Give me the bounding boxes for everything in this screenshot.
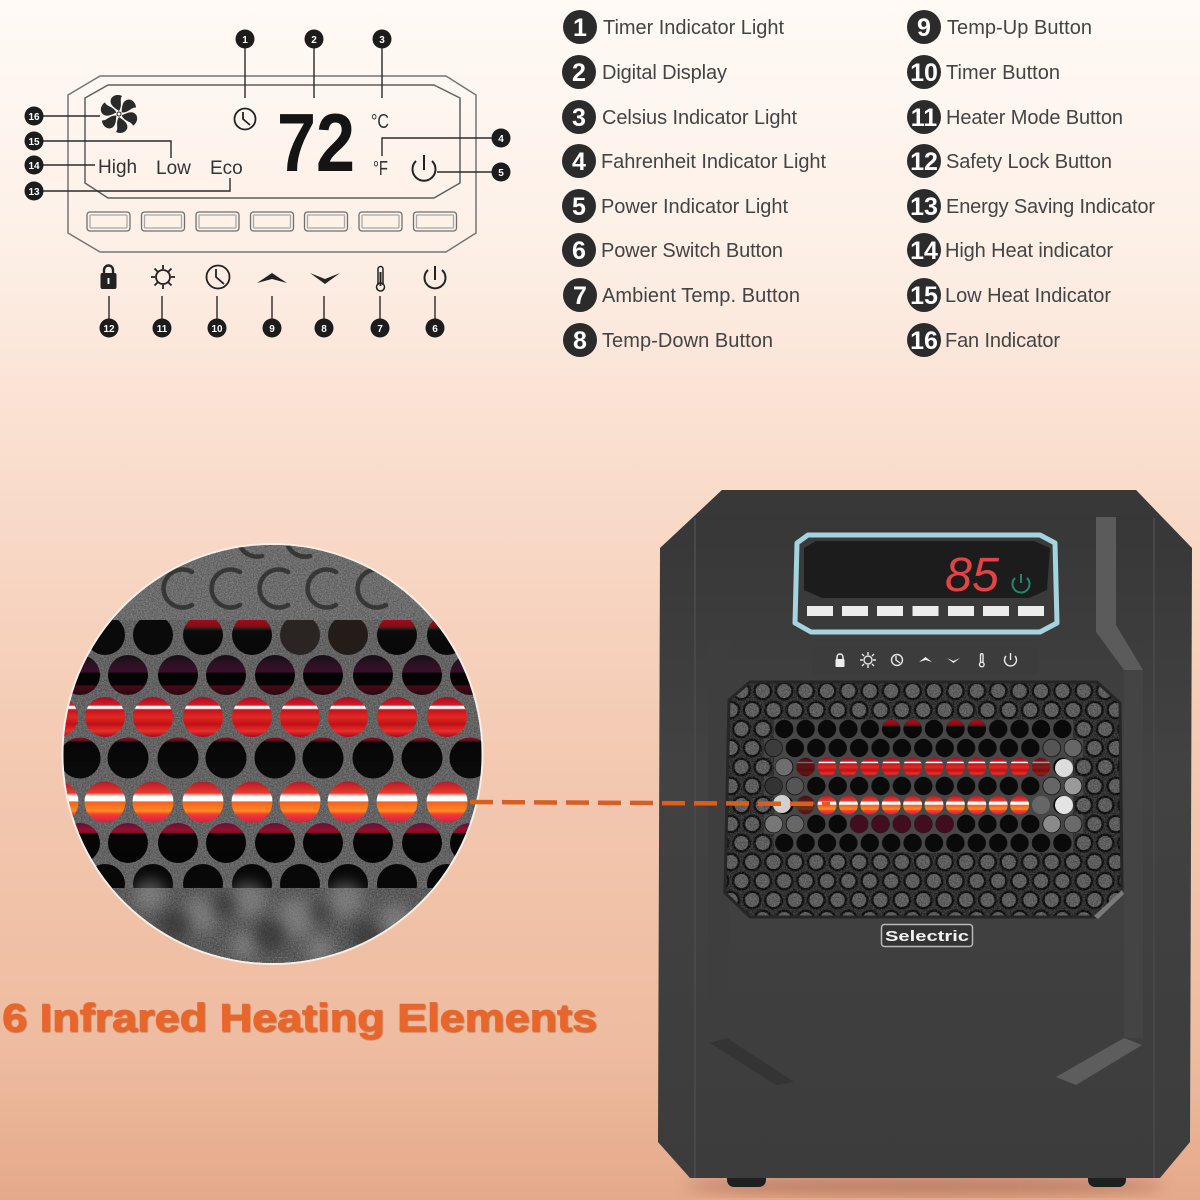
legend: right column: Fan Indicator (945, 330, 1060, 352)
leader lines (34, 39, 501, 328)
heat mode labels: Low (156, 158, 191, 179)
icon: thermometer (376, 266, 384, 291)
hole row 3: glowing element (38, 697, 467, 737)
icon: down arrow (310, 273, 340, 284)
zoomed lens: heating elements (38, 540, 490, 970)
legend: left column: Power Switch Button (601, 240, 783, 262)
legend: left column: Power Indicator Light (601, 196, 788, 218)
mesh top band with dimples (112, 545, 433, 620)
panel outline (68, 76, 476, 252)
bottom trim: right (1056, 1038, 1142, 1085)
end cap highlights: right (1043, 740, 1082, 832)
reflected glow (850, 815, 954, 833)
grille frame edge (725, 682, 1122, 917)
grille corner highlight (1094, 890, 1124, 919)
feet (727, 1172, 1126, 1187)
hole row 6 (60, 823, 490, 863)
logo badge (882, 924, 972, 946)
heater product (658, 490, 1192, 1187)
panel buttons (87, 212, 456, 231)
legend: right column: Timer Button (946, 62, 1060, 84)
perforated mesh base (60, 540, 490, 970)
mesh bottom band with soft dimples (112, 872, 433, 963)
numbered callouts: 9 (269, 324, 275, 335)
celsius and fahrenheit labels (371, 111, 389, 180)
celsius and fahrenheit labels: °C (371, 111, 389, 133)
legend: right column: Temp-Up Button (947, 17, 1092, 39)
legend: right column: 10 (910, 59, 938, 87)
end cap highlights: left (765, 740, 804, 832)
heat mode labels: Eco (210, 158, 243, 179)
legend: left column: 7 (573, 282, 587, 310)
icon: power (425, 266, 446, 288)
icon: lock (100, 266, 116, 289)
heater shadow (685, 1176, 1165, 1196)
hole row 5: glowing element (38, 782, 468, 822)
legend: left column: Digital Display (602, 62, 727, 84)
icon: up arrow (257, 273, 287, 283)
numbered callouts: 12 (103, 324, 115, 335)
legend: right column: Low Heat Indicator (945, 285, 1111, 307)
display screen (804, 541, 1050, 598)
open grille area (764, 720, 1083, 852)
hole row 2 (60, 655, 490, 695)
numbered callouts: 2 (311, 35, 317, 46)
legend: left column: Fahrenheit Indicator Light (601, 151, 826, 173)
body shading panels (694, 490, 1160, 1178)
hole row 4 (60, 738, 490, 778)
heater body (658, 490, 1192, 1178)
numbered callouts: 11 (157, 324, 168, 335)
numbered callouts (24, 30, 510, 338)
legend: left column: 5 (572, 193, 586, 221)
legend: left column: Celsius Indicator Light (602, 107, 797, 129)
lens frame (62, 543, 484, 965)
legend: right column (907, 10, 1155, 357)
icon: fan (98, 95, 140, 133)
numbered callouts: 14 (28, 161, 40, 172)
legend: right column: 11 (911, 104, 937, 132)
legend: right column: 16 (910, 327, 938, 355)
heater icon strip (812, 645, 1038, 675)
numbered callouts: 10 (211, 324, 223, 335)
display panel (795, 535, 1057, 632)
numbered callouts: 5 (498, 168, 504, 179)
icon: sun (151, 265, 175, 289)
glowing heater element: lower (796, 796, 1050, 814)
legend: left column: 8 (573, 327, 587, 355)
hole row 1 (92, 618, 456, 655)
legend: left column: Timer Indicator Light (603, 17, 784, 39)
red tint in top row (882, 720, 986, 738)
control panel diagram (24, 30, 510, 338)
legend: right column: 15 (910, 282, 938, 310)
numbered callouts: 8 (321, 324, 327, 335)
digital display reading: 72 (277, 96, 355, 189)
legend: right column: 14 (910, 237, 938, 265)
display buttons (807, 606, 1044, 616)
celsius and fahrenheit labels: °F (373, 158, 388, 180)
legend: right column: 12 (910, 148, 938, 176)
title: 6 Infrared Heating Elements (2, 997, 597, 1040)
legend: right column: Safety Lock Button (946, 151, 1112, 173)
legend: left column: 2 (572, 59, 586, 87)
dashed pointer line (470, 802, 830, 804)
logo badge: Selectric (885, 928, 969, 945)
icon: power indicator (412, 155, 436, 181)
legend: left column: Ambient Temp. Button (602, 285, 800, 307)
bottom trim: left (710, 1038, 794, 1085)
right grey trim strip (1096, 517, 1143, 670)
heat mode labels (98, 157, 243, 179)
legend: left column: 3 (572, 104, 586, 132)
heater grille (720, 678, 1125, 921)
numbered callouts: 3 (379, 35, 385, 46)
legend: left column: 6 (572, 237, 586, 265)
legend: right column: 13 (910, 193, 938, 221)
numbered callouts: 16 (28, 112, 40, 123)
numbered callouts: 15 (28, 137, 40, 148)
hole row 7 (96, 864, 450, 897)
outer dimpled grille (720, 678, 1125, 921)
numbered callouts: 13 (28, 187, 40, 198)
numbered callouts: 1 (242, 35, 248, 46)
legend: right column: Energy Saving Indicator (946, 196, 1155, 218)
lower icon row (100, 265, 446, 291)
glowing heater element: upper (796, 758, 1050, 776)
numbered callouts: 6 (432, 324, 438, 335)
legend: right column: Heater Mode Button (946, 107, 1123, 129)
heat mode labels: High (98, 157, 137, 178)
legend: left column: 4 (572, 148, 586, 176)
legend: right column: 9 (917, 14, 931, 42)
numbered callouts: 4 (498, 134, 504, 145)
legend: left column (562, 10, 826, 357)
icon: timer clock (234, 108, 256, 130)
legend: left column: Temp-Down Button (602, 330, 773, 352)
temperature reading: 85 (945, 549, 999, 602)
legend: right column: High Heat indicator (945, 240, 1113, 262)
icon: green power light (1012, 574, 1030, 593)
icon: clock (206, 266, 230, 288)
numbered callouts: 7 (377, 324, 383, 335)
legend: left column: 1 (573, 14, 587, 42)
